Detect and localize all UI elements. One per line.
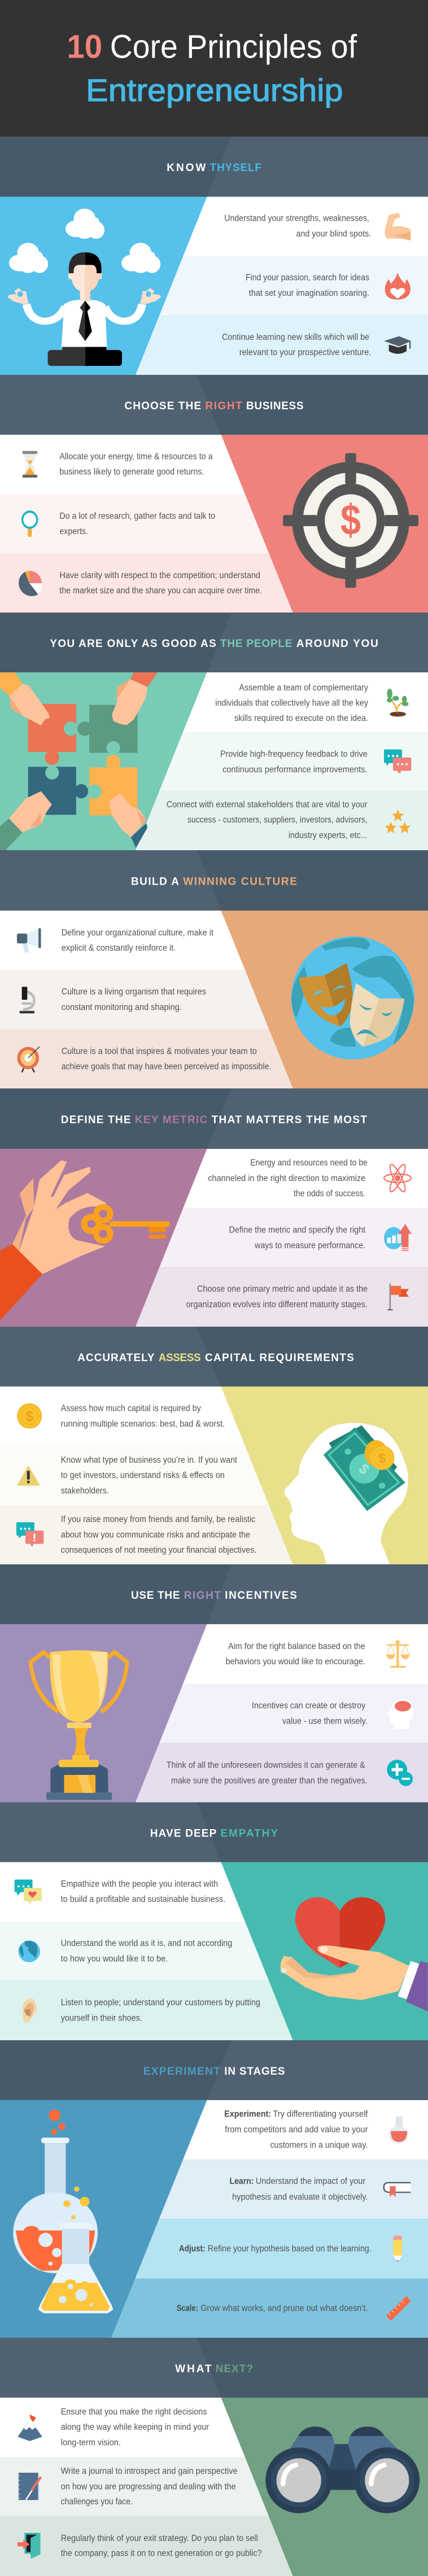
text: allocate: business likely to generate good returns. <box>59 467 204 476</box>
rows <box>0 1862 428 2040</box>
text: exit strategy: Regularly think of your exit strategy. Do you plan to sell <box>61 2534 258 2543</box>
text: exit strategy: the company, pass it on to next generation or go public? <box>61 2549 262 2558</box>
text: world: Understand the world as it is, and not according <box>61 1939 232 1948</box>
text: stakeholders: success - customers, suppliers, investors, advisors, <box>187 815 368 825</box>
text: friends and family: about how you communicate risks and anticipate the <box>61 1530 250 1540</box>
icon: graduation cap <box>384 336 411 354</box>
text: journal: Write a journal to introspect and gain perspective <box>61 2466 238 2476</box>
icon: globe <box>18 1940 40 1962</box>
header: what next: NEXT? <box>216 2363 253 2375</box>
title banner <box>0 0 428 137</box>
icon: notebook and pen <box>18 2473 41 2500</box>
text: downsides: make sure the positives are greater than the negatives. <box>171 1776 368 1786</box>
icon: megaphone <box>17 928 41 953</box>
text: strengths: Understand your strengths, weaknesses, <box>224 213 369 223</box>
text: assess: running multiple scenarios: best, bad & worst. <box>61 1419 225 1429</box>
text: downsides: Think of all the unforeseen downsides it can generate & <box>167 1760 365 1770</box>
header: assess capital: ASSESS <box>159 1352 201 1364</box>
text: passion: Find your passion, search for ideas <box>246 273 369 283</box>
text: strengths <box>224 213 371 239</box>
text: balance: behaviors you would like to encourage. <box>226 1657 365 1667</box>
section 3: the people around you <box>0 613 428 850</box>
header: empathy: EMPATHY <box>220 1828 278 1839</box>
header: know thyself: KNOW <box>167 162 206 174</box>
text: living organism: constant monitoring and shaping. <box>62 1003 182 1012</box>
text: downsides <box>167 1760 368 1786</box>
illustration: chemistry flasks <box>13 2109 113 2313</box>
header: experiment: IN STAGES <box>224 2066 285 2078</box>
text: friends and family: If you raise money from friends and family, be realistic <box>61 1515 256 1524</box>
header: choose the right business: RIGHT <box>206 400 242 412</box>
section 1: know thyself <box>0 137 428 375</box>
text: learn: Understand the impact of your <box>256 2177 365 2186</box>
text: listen: yourself in their shoes. <box>61 2013 142 2023</box>
text: stakeholders <box>167 800 368 840</box>
teal panel <box>0 672 207 850</box>
text: business type <box>61 1455 238 1495</box>
rows <box>0 196 428 375</box>
header: what next: WHAT <box>175 2363 212 2375</box>
header: key metric: KEY METRIC <box>135 1114 208 1126</box>
header: choose the right business: CHOOSE THE <box>124 400 201 412</box>
text: scale: Grow what works, and prune out what doesn’t. <box>200 2304 368 2313</box>
rows <box>0 1149 428 1327</box>
text: primary metric: Choose one primary metric and update it as the <box>197 1284 368 1294</box>
text: define metric <box>229 1225 366 1250</box>
icon: plant <box>387 689 409 716</box>
green panel <box>221 2398 428 2576</box>
header: choose the right business: BUSINESS <box>246 400 304 412</box>
icon: growth chart <box>384 1224 412 1251</box>
text: listen <box>61 1998 260 2023</box>
text: team: individuals that collectively have all the key <box>215 698 368 708</box>
text: team: skills required to execute on the idea. <box>234 714 368 723</box>
text: scale: Scale: <box>177 2304 198 2313</box>
header: key metric: THAT MATTERS THE MOST <box>212 1114 367 1126</box>
text: empathize: to build a profitable and sustainable business. <box>61 1895 225 1904</box>
icon: head with brain <box>387 1699 413 1729</box>
text: adjust: Refine your hypothesis based on the learning. <box>208 2244 372 2254</box>
text: team: Assemble a team of complementary <box>239 683 368 693</box>
icon: warning triangle <box>17 1466 40 1486</box>
icon: chat bubbles <box>384 750 411 774</box>
text: friends and family: consequences of not meeting your financial objectives. <box>61 1546 256 1555</box>
text: create or destroy <box>252 1701 368 1726</box>
text: friends and family <box>61 1515 256 1555</box>
icon: muscle arm <box>385 213 410 240</box>
section 10: what next <box>0 2338 428 2576</box>
text: experiment: from competitors and add value to your <box>225 2125 368 2135</box>
text: living organism: Culture is a living organism that requires <box>62 987 206 997</box>
illustration: hand holding heart <box>281 1897 428 2011</box>
text: learn: Learn: <box>229 2177 254 2186</box>
text: create or destroy: Incentives can create or destroy <box>252 1701 365 1711</box>
text: passion <box>246 273 369 298</box>
header: experiment: EXPERIMENT <box>143 2066 220 2078</box>
icon: hourglass <box>23 451 37 478</box>
icon: book <box>384 2183 410 2197</box>
header: key metric <box>0 1088 428 1149</box>
header: winning culture: WINNING CULTURE <box>183 876 297 887</box>
header: the people: AROUND YOU <box>296 638 378 650</box>
text: energy <box>208 1158 368 1199</box>
header: the people <box>0 613 428 672</box>
text: vision: Ensure that you make the right decisions <box>61 2407 207 2417</box>
text: world: to how you would like it to be. <box>61 1954 168 1963</box>
header: assess capital: CAPITAL REQUIREMENTS <box>205 1352 354 1364</box>
text: competition: Have clarity with respect to the competition; understand <box>59 571 260 580</box>
text: research <box>59 511 215 536</box>
section 2: choose the right business <box>0 375 428 613</box>
header: experiment <box>0 2040 428 2100</box>
text: stakeholders: Connect with external stakeholders that are vital to your <box>167 800 368 810</box>
illustration: head with money: $ <box>355 1460 373 1478</box>
text: allocate: Allocate your energy, time & resources to a <box>59 452 213 462</box>
text: balance <box>226 1642 365 1667</box>
header: key metric: DEFINE THE <box>61 1114 131 1126</box>
icon: flag <box>387 1283 409 1310</box>
header: incentives: RIGHT <box>184 1590 221 1602</box>
header: winning culture <box>0 850 428 911</box>
text: assess <box>61 1403 225 1429</box>
text: journal: challenges you face. <box>61 2497 133 2507</box>
rows <box>0 1624 428 1802</box>
header: assess capital: ACCURATELY <box>77 1352 155 1364</box>
text: strengths: and your blind spots. <box>296 229 371 239</box>
text: primary metric: organization evolves into different maturity stages. <box>186 1300 368 1310</box>
text: experiment: Experiment: <box>224 2109 271 2119</box>
illustration: dollar target <box>283 453 418 588</box>
text: living organism <box>62 987 206 1012</box>
text: vision: along the way while keeping in mind your <box>61 2422 209 2432</box>
header: choose the right business <box>0 375 428 435</box>
text: define metric: Define the metric and specify the right <box>229 1225 366 1235</box>
text: journal: on how you are progressing and dealing with the <box>61 2482 236 2491</box>
icon: coin: $ <box>25 1409 33 1424</box>
header: empathy <box>0 1802 428 1862</box>
text: business type: to get investors, understand risks & effects on <box>61 1471 225 1480</box>
orange panel <box>221 911 428 1088</box>
teal panel <box>221 1862 428 2040</box>
salmon panel <box>221 435 428 613</box>
header: the people: YOU ARE ONLY AS GOOD AS <box>50 638 216 650</box>
text: define culture: explicit & constantly reinforce it. <box>62 943 176 953</box>
text: feedback: continuous performance improvements. <box>222 765 368 775</box>
icon: ear <box>23 1998 37 2023</box>
text: learning: Continue learning new skills which will be <box>222 333 369 342</box>
text: tool: achieve goals that may have been perceived as impossible. <box>62 1062 271 1071</box>
icon: flame <box>385 273 410 300</box>
blue panel <box>0 2100 207 2338</box>
title line one: 10 <box>67 28 102 65</box>
text: journal <box>61 2466 238 2507</box>
text: adjust: Adjust: <box>179 2244 206 2254</box>
text: empathize <box>61 1879 225 1904</box>
icon: coin <box>18 1404 41 1428</box>
illustration: binoculars <box>265 2426 420 2513</box>
text: experiment: customers in a unique way. <box>270 2140 368 2150</box>
header: empathy: HAVE DEEP <box>150 1828 217 1839</box>
section 6: capital requirements <box>0 1327 428 1564</box>
text: world <box>61 1939 232 1963</box>
text: energy: the odds of success. <box>294 1189 365 1199</box>
blue panel <box>0 196 207 375</box>
lavender panel <box>0 1624 207 1802</box>
icon: microscope <box>20 987 34 1013</box>
illustration: hand holding key <box>0 1160 170 1320</box>
text: experiment: Try differentiating yourself <box>273 2109 368 2119</box>
header: winning culture: BUILD A <box>131 876 179 887</box>
icon: exit door <box>18 2533 41 2558</box>
section 9: experiment in stages <box>0 2040 428 2338</box>
text: allocate <box>59 452 213 476</box>
text: define culture <box>62 928 214 953</box>
text: balance: Aim for the right balance based on the <box>228 1642 365 1651</box>
text: create or destroy: value - use them wisely. <box>282 1716 368 1726</box>
illustration: trophy <box>30 1650 127 1800</box>
header: what next <box>0 2338 428 2398</box>
section 8: deep empathy <box>0 1802 428 2040</box>
text: business type: Know what type of business you’re in. If you want <box>61 1455 238 1465</box>
icon: atom <box>384 1162 411 1193</box>
illustration: puzzle and hands <box>0 672 158 850</box>
icon: alert chat <box>16 1522 43 1547</box>
icon: three stars <box>385 810 410 833</box>
text: feedback <box>220 750 368 775</box>
icon: archery target <box>17 1047 40 1072</box>
purple panel <box>0 1149 207 1327</box>
rows <box>0 911 428 1088</box>
title line one: Core Principles of <box>110 28 357 65</box>
text: competition: the market size and the share you can acquire over time. <box>59 586 262 596</box>
text: feedback: Provide high-frequency feedback to drive <box>220 750 368 759</box>
header: know thyself: THYSELF <box>210 162 261 174</box>
text: learning: relevant to your prospective venture. <box>239 348 371 357</box>
text: team <box>215 683 368 723</box>
section 7: right incentives <box>0 1564 428 1802</box>
yellow panel <box>221 1387 428 1564</box>
text: define metric: ways to measure performance. <box>254 1241 365 1250</box>
header: incentives: INCENTIVES <box>225 1590 297 1602</box>
header: incentives <box>0 1564 428 1624</box>
text: stakeholders: industry experts, etc... <box>289 831 368 840</box>
illustration: dollar target: $ <box>340 496 361 544</box>
rows <box>0 435 428 613</box>
rows <box>0 672 428 850</box>
illustration: globe and theatre masks <box>291 937 414 1060</box>
text: passion: that set your imagination soaring. <box>249 288 369 298</box>
text: listen: Listen to people; understand your customers by putting <box>61 1998 260 2008</box>
header: incentives: USE THE <box>131 1590 180 1602</box>
text: primary metric <box>186 1284 368 1310</box>
text: empathize: Empathize with the people you interact with <box>61 1879 218 1889</box>
rows <box>0 1387 428 1564</box>
text: energy: channeled in the right direction to maximize <box>208 1174 365 1183</box>
icon: ruler <box>386 2296 410 2321</box>
illustration: head with money: $ <box>378 1451 386 1466</box>
icon: plus and minus <box>387 1760 413 1786</box>
text: learn: hypothesis and evaluate it objectively. <box>232 2192 368 2202</box>
text: vision: long-term vision. <box>61 2438 121 2447</box>
text: research: Do a lot of research, gather facts and talk to <box>59 511 215 521</box>
text: business type: stakeholders. <box>61 1486 109 1495</box>
section 5: key metric <box>0 1088 428 1327</box>
text: research: experts. <box>59 527 88 536</box>
section 4: winning culture <box>0 850 428 1088</box>
icon: mountain flag <box>18 2415 42 2441</box>
icon: heart chat <box>15 1879 42 1904</box>
text: experiment <box>224 2109 368 2150</box>
text: learning <box>222 333 371 357</box>
text: vision <box>61 2407 209 2447</box>
text: assess: Assess how much capital is required by <box>61 1403 201 1414</box>
text: tool: Culture is a tool that inspires & motivates your team to <box>62 1047 257 1056</box>
text: energy: Energy and resources need to be <box>250 1158 368 1167</box>
illustration: head with money <box>285 1423 408 1564</box>
text: learn <box>229 2177 368 2202</box>
icon: round flask <box>389 2116 409 2144</box>
illustration: meditating man <box>7 209 161 366</box>
header: assess capital <box>0 1327 428 1387</box>
icon: pie chart <box>19 571 42 596</box>
icon: magnifier <box>23 511 37 537</box>
text: tool <box>62 1047 271 1071</box>
header: know thyself <box>0 137 428 196</box>
rows <box>0 2398 428 2576</box>
text: exit strategy <box>61 2534 262 2558</box>
text: competition <box>59 571 262 596</box>
header: the people: THE PEOPLE <box>220 638 292 650</box>
title line two: Entrepreneurship <box>86 72 343 108</box>
rows <box>0 2100 428 2338</box>
text: define culture: Define your organizational culture, make it <box>62 928 214 938</box>
icon: pencil <box>393 2236 402 2262</box>
icon: scales <box>386 1640 410 1668</box>
